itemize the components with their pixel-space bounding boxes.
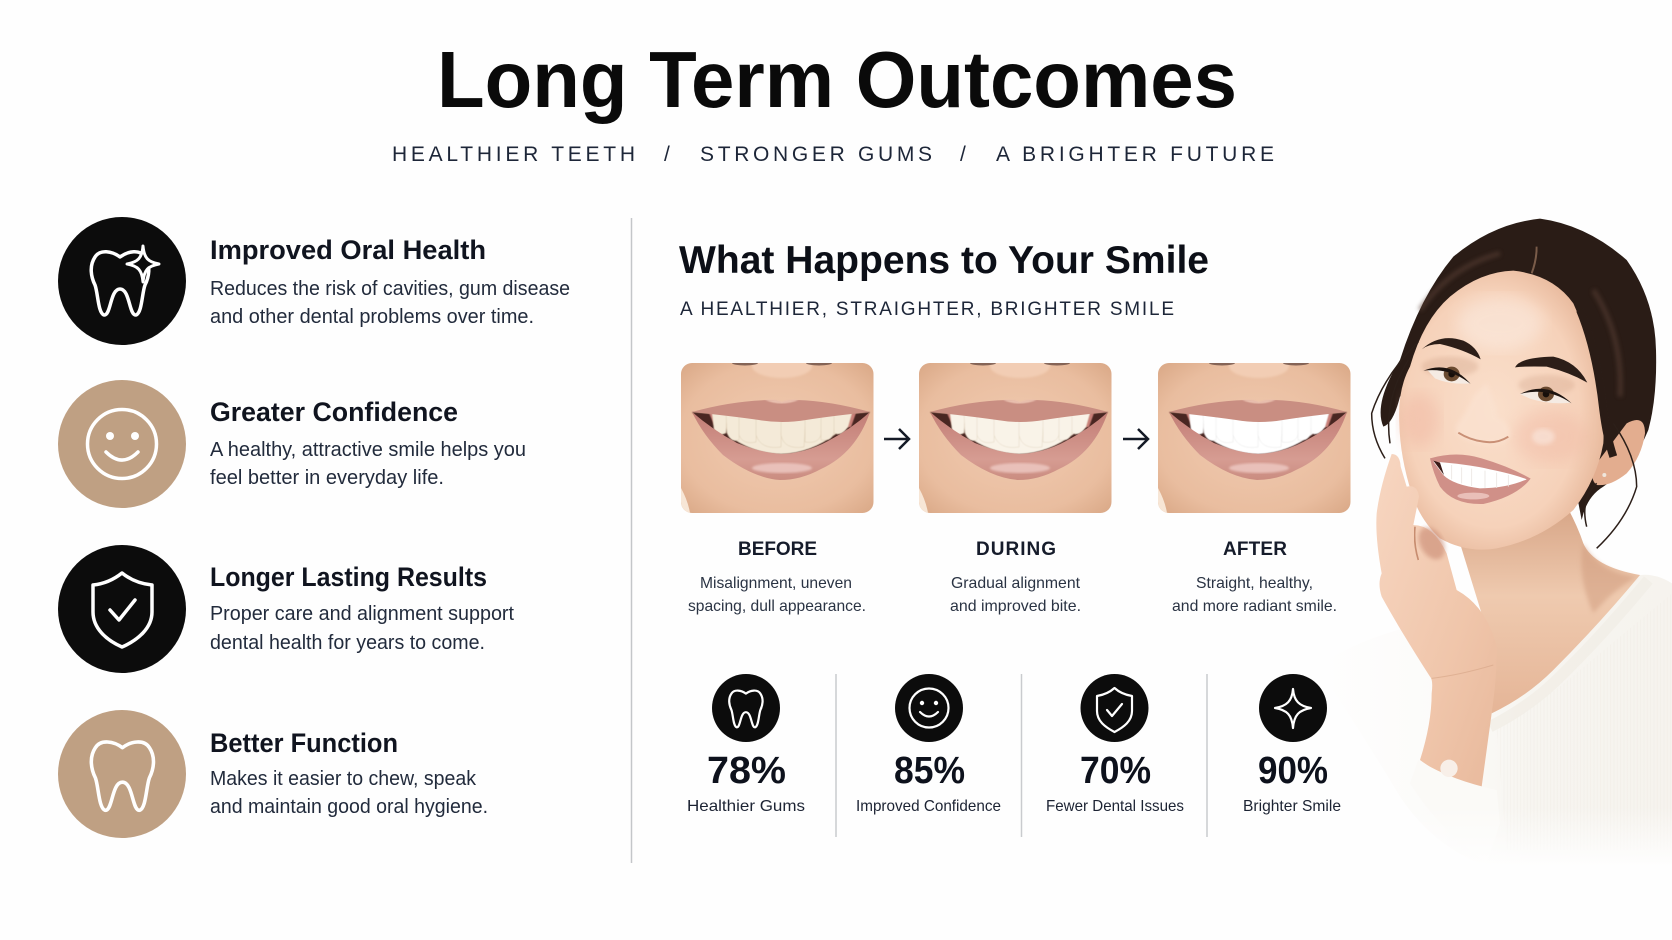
stage: during: DURING xyxy=(976,539,1056,560)
brows xyxy=(1422,338,1481,359)
stat: improved confidence: Improved Confidence xyxy=(856,798,1001,815)
subtitle: A BRIGHTER FUTURE xyxy=(996,143,1274,166)
bottom fade xyxy=(1300,807,1672,867)
stage: during xyxy=(950,539,1081,615)
subheading: A HEALTHIER, STRAIGHTER, BRIGHTER SMILE xyxy=(680,299,1174,320)
photo: after smile xyxy=(1158,354,1351,513)
icon: smiley xyxy=(895,674,963,742)
heading: Better Function xyxy=(210,728,398,758)
photo: before smile xyxy=(681,354,874,513)
smile xyxy=(1430,454,1531,504)
stat: improved confidence xyxy=(856,674,1001,815)
subtitle xyxy=(392,143,1274,166)
title: Long Term Outcomes xyxy=(437,35,1237,124)
panel: benefits list xyxy=(58,217,570,838)
description xyxy=(210,278,570,328)
icon: smiley xyxy=(58,380,186,508)
stage: after: AFTER xyxy=(1223,539,1287,560)
stage: after: Straight, healthy, xyxy=(1196,575,1313,592)
description: and other dental problems over time. xyxy=(210,306,534,328)
stage: before: Misalignment, uneven xyxy=(700,575,852,592)
photo: during smile xyxy=(919,354,1112,513)
stat: healthier gums: 78% xyxy=(707,750,786,792)
benefit: greater confidence xyxy=(58,380,526,508)
arrow: before to during xyxy=(884,429,909,449)
panel: what happens heading: What Happens to Your Smile xyxy=(679,239,1209,282)
subtitle: STRONGER GUMS xyxy=(700,143,932,166)
eyes xyxy=(1423,367,1572,403)
arrow: during to after xyxy=(1123,429,1148,449)
heading: Greater Confidence xyxy=(210,397,458,427)
description: feel better in everyday life. xyxy=(210,467,444,489)
description xyxy=(210,768,488,818)
icon: tooth with sparkle xyxy=(58,217,186,345)
sweater and neck xyxy=(1317,500,1672,867)
stat: healthier gums: Healthier Gums xyxy=(687,798,805,815)
icon: shield xyxy=(1080,674,1148,742)
stage: before: BEFORE xyxy=(738,539,817,560)
hand xyxy=(1300,454,1672,867)
stage: during: Gradual alignment xyxy=(951,575,1081,592)
stage: during: and improved bite. xyxy=(950,598,1081,615)
benefit: better function xyxy=(58,710,488,838)
photo: smiling woman xyxy=(1300,219,1672,867)
head xyxy=(1372,219,1656,550)
stat: brighter smile: Brighter Smile xyxy=(1243,798,1341,815)
subtitle: HEALTHIER TEETH xyxy=(392,143,635,166)
cuff xyxy=(1410,760,1500,863)
stage: before: spacing, dull appearance. xyxy=(688,598,866,615)
stat: fewer dental issues: Fewer Dental Issues xyxy=(1046,798,1184,815)
stat: improved confidence: 85% xyxy=(894,750,965,792)
description: Reduces the risk of cavities, gum disease xyxy=(210,278,570,300)
face skin xyxy=(1399,271,1604,550)
stat: healthier gums xyxy=(687,674,805,815)
benefit: improved oral health xyxy=(58,217,570,345)
face shading xyxy=(1513,410,1587,463)
description: dental health for years to come. xyxy=(210,632,485,654)
ear xyxy=(1592,420,1645,485)
hair xyxy=(1381,219,1656,520)
icon: sparkle xyxy=(1259,674,1327,742)
description xyxy=(210,439,526,489)
nose xyxy=(1456,383,1510,444)
stray hair xyxy=(1372,342,1637,548)
stat: brighter smile xyxy=(1243,674,1341,815)
icon: shield xyxy=(58,545,186,673)
stat: brighter smile: 90% xyxy=(1258,750,1328,792)
stage: before xyxy=(688,539,866,615)
subtitle: / xyxy=(664,143,670,166)
stage: after xyxy=(1172,539,1337,615)
description: Makes it easier to chew, speak xyxy=(210,768,477,790)
heading: Improved Oral Health xyxy=(210,235,486,265)
description xyxy=(210,603,514,654)
icon: tooth xyxy=(712,674,780,742)
benefit: longer lasting results xyxy=(58,545,514,673)
description: and maintain good oral hygiene. xyxy=(210,796,488,818)
description: A healthy, attractive smile helps you xyxy=(210,439,526,461)
subtitle: / xyxy=(960,143,966,166)
stage: after: and more radiant smile. xyxy=(1172,598,1337,615)
heading: Longer Lasting Results xyxy=(210,562,487,592)
stat: fewer dental issues: 70% xyxy=(1080,750,1151,792)
description: Proper care and alignment support xyxy=(210,603,514,625)
icon: tooth xyxy=(58,710,186,838)
stat: fewer dental issues xyxy=(1046,674,1184,815)
